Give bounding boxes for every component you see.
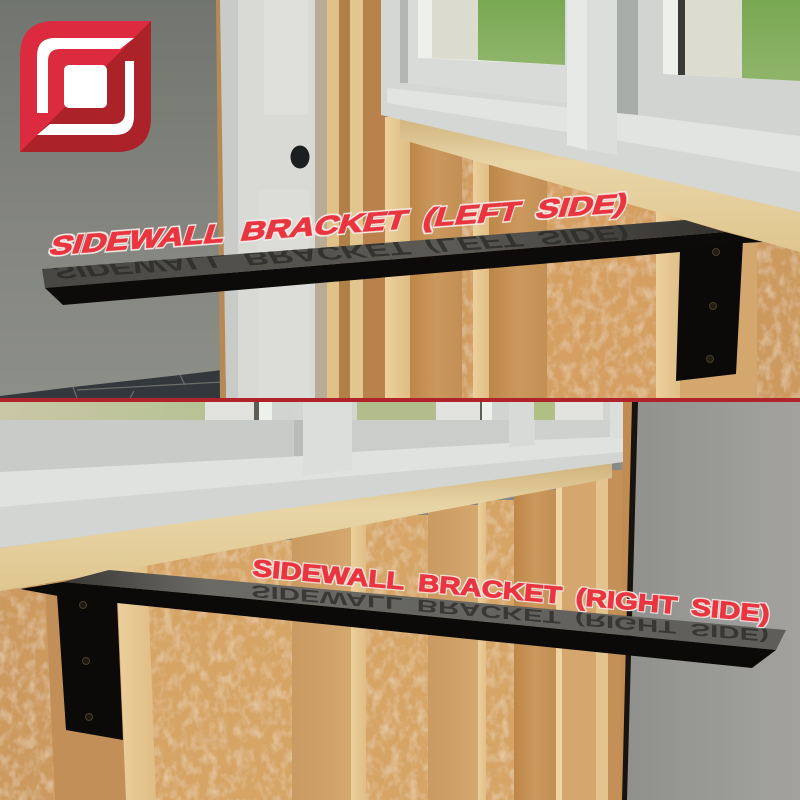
wall framing studs	[0, 402, 638, 800]
window glass	[0, 402, 603, 420]
door knob	[290, 146, 310, 168]
window sashes	[387, 0, 800, 172]
bracket vertical leg	[57, 594, 123, 740]
gray wall	[620, 402, 800, 800]
gray wall	[0, 0, 218, 254]
bracket arm front face	[45, 232, 763, 305]
bracket vertical leg	[676, 240, 743, 381]
logo	[20, 21, 151, 152]
reflected label on bracket: SIDEWALL BRACKET (RIGHT SIDE)	[251, 581, 769, 645]
panel: left side view	[0, 0, 800, 398]
label: sidewall bracket left side: SIDEWALL BRACKET (LEFT SIDE)	[46, 188, 632, 261]
bracket arm top face	[63, 570, 786, 650]
bracket arm top face	[42, 220, 725, 288]
reflected label on bracket: SIDEWALL BRACKET (LEFT SIDE)	[47, 221, 634, 282]
label: sidewall bracket right side: SIDEWALL BRACKET (RIGHT SIDE)	[251, 555, 771, 628]
wood board under window	[0, 462, 612, 591]
wall framing studs	[327, 0, 800, 398]
wood board under window	[400, 115, 800, 252]
window frame	[0, 402, 623, 548]
panel: right side view	[0, 402, 800, 800]
window glass	[418, 0, 800, 81]
divider line	[0, 398, 800, 402]
bracket arm front face	[20, 582, 776, 668]
window frame	[381, 0, 800, 212]
window sashes	[0, 402, 623, 507]
floor tiles	[0, 370, 238, 398]
door frame and door	[216, 0, 327, 398]
